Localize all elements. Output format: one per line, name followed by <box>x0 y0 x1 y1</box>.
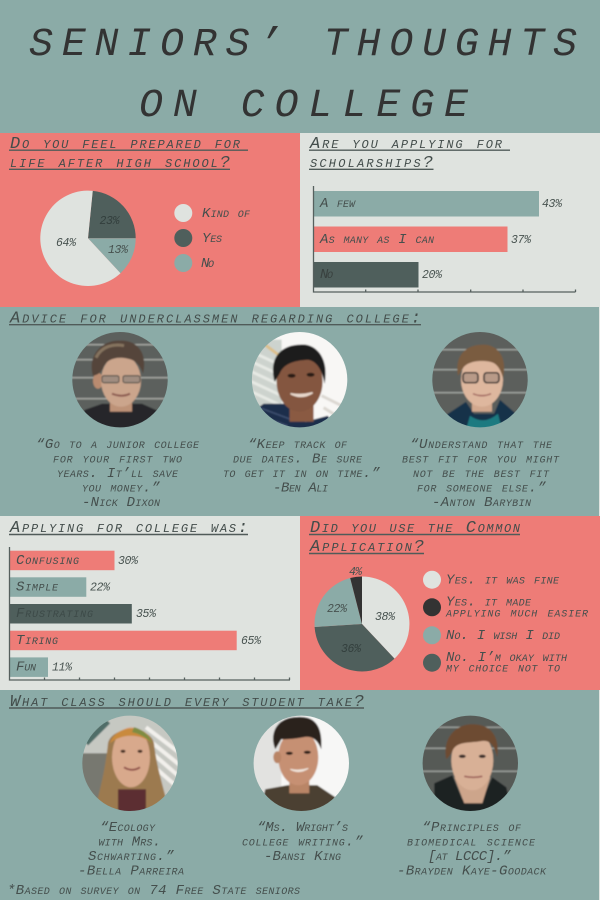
panel: prepared for life after high school <box>0 133 300 307</box>
quote: Ben Ali <box>223 437 381 496</box>
pie chart: common application: 4% <box>349 566 363 579</box>
quote: Bansi King: “Ms. Wright’s <box>257 820 348 836</box>
quote: Brayden Kaye-Goodack <box>397 820 547 880</box>
pie chart: prepared <box>40 191 136 286</box>
portrait: Ben Ali <box>250 330 350 430</box>
quote: Bansi King: college writing.” <box>242 834 364 850</box>
bar chart: applying: Frustrating <box>16 606 93 622</box>
quote: Anton Barybin: not be the best fit <box>413 466 550 482</box>
heading: prepared: Do you feel prepared for <box>10 135 241 154</box>
quote: Bella Parreira: -Bella Parreira <box>78 864 184 880</box>
quote: Bansi King: -Bansi King <box>264 849 341 865</box>
heading: common application <box>309 519 521 557</box>
bar chart: scholarships: A few <box>319 196 356 212</box>
quote: Bansi King <box>242 820 364 865</box>
panel: applying for scholarships <box>300 133 600 307</box>
heading: applying: Applying for college was: <box>9 519 248 538</box>
heading: prepared <box>9 135 248 173</box>
panel: common application <box>300 516 600 690</box>
bar chart: applying: Fun <box>16 660 36 676</box>
quote: Nick Dixon: years. It’ll save <box>57 466 179 482</box>
pie chart: prepared: 64% <box>56 237 77 250</box>
bar chart: applying: Simple <box>16 580 59 596</box>
heading: advice: Advice for underclassmen regarding college: <box>9 310 421 328</box>
heading: scholarships: Are you applying for <box>309 135 503 154</box>
legend: common application <box>423 571 588 676</box>
title: SENIORS’ THOUGHTS <box>29 23 577 68</box>
legend: prepared <box>174 204 251 272</box>
quote: Nick Dixon: for your first two <box>53 452 182 468</box>
quote: Ben Ali: to get it in on time.” <box>223 466 381 482</box>
quote: Brayden Kaye-Goodack: biomedical science <box>407 834 536 850</box>
legend: prepared: Yes <box>202 231 222 247</box>
portrait: Brayden Kaye-Goodack <box>420 713 520 813</box>
bar chart: scholarships: 20% <box>422 269 443 282</box>
quote: Brayden Kaye-Goodack: “Principles of <box>422 820 522 836</box>
quote: Brayden Kaye-Goodack: -Brayden Kaye-Goodack <box>397 864 547 880</box>
legend: prepared: No <box>201 256 214 272</box>
quote: Brayden Kaye-Goodack: [at LCCC].” <box>428 849 512 865</box>
footnote: *Based on survey on 74 Free State seniors <box>7 883 300 899</box>
bar chart: applying: 35% <box>136 608 157 621</box>
legend: prepared: Kind of <box>202 206 251 222</box>
quote: Bella Parreira: with Mrs. <box>98 834 161 850</box>
title: ON COLLEGE <box>139 84 469 129</box>
quote: Anton Barybin: best fit for you might <box>402 452 560 468</box>
heading: common application: Application? <box>309 538 424 557</box>
panel: advice for underclassmen <box>0 307 600 516</box>
heading: prepared: life after high school? <box>10 154 230 173</box>
bar chart: applying <box>10 547 290 680</box>
heading: scholarships: scholarships? <box>310 154 433 173</box>
pie chart: common application: 38% <box>375 611 396 624</box>
pie chart: common application: 22% <box>327 603 348 616</box>
legend: common application: Yes. it made <box>446 595 532 611</box>
bar chart: scholarships: As many as I can <box>319 232 434 248</box>
bar chart: applying: 30% <box>118 555 139 568</box>
legend: common application: No. I’m okay with <box>446 650 567 666</box>
quote: Nick Dixon: you money.” <box>82 480 161 496</box>
pie chart: common application <box>315 566 409 671</box>
quote: Nick Dixon: -Nick Dixon <box>82 495 160 511</box>
bar chart: applying: 22% <box>90 582 111 594</box>
heading: scholarships <box>309 135 510 173</box>
bar chart: scholarships: No <box>320 267 333 283</box>
panel: applying for college was <box>0 516 300 690</box>
panel: class every student should take <box>0 690 600 900</box>
quote: Bella Parreira: “Ecology <box>100 820 156 836</box>
legend: common application: applying much easier <box>445 606 588 622</box>
bar chart: scholarships <box>314 186 576 292</box>
quote: Anton Barybin: -Anton Barybin <box>432 495 531 511</box>
quote: Nick Dixon: “Go to a junior college <box>36 437 200 453</box>
bar chart: applying: 65% <box>241 635 262 648</box>
bar chart: scholarships: 37% <box>511 234 532 247</box>
quote: Anton Barybin <box>402 437 560 511</box>
quote: Bella Parreira: Schwarting.” <box>88 849 175 865</box>
pie chart: prepared: 23% <box>100 215 121 228</box>
quote: Nick Dixon <box>36 437 200 511</box>
quote: Anton Barybin: for someone else.” <box>417 480 547 496</box>
title <box>29 23 577 129</box>
heading: common application: Did you use the Common <box>310 519 521 538</box>
legend: common application: Yes. it was fine <box>446 572 560 588</box>
bar chart: applying: 11% <box>52 662 73 674</box>
legend: common application: my choice not to <box>446 660 560 676</box>
bar chart: scholarships: 43% <box>542 198 563 211</box>
quote: Anton Barybin: “Understand that the <box>410 437 553 453</box>
legend: common application: No. I wish I did <box>446 628 560 644</box>
quote: Bella Parreira <box>78 820 184 880</box>
portrait: Bansi King <box>251 713 351 813</box>
heading: class: What class should every student take? <box>10 693 364 712</box>
pie chart: common application: 36% <box>341 643 362 656</box>
bar chart: applying: Tiring <box>16 633 58 649</box>
portrait: Anton Barybin <box>430 330 530 430</box>
quote: Ben Ali: “Keep track of <box>248 437 348 453</box>
pie chart: prepared: 13% <box>108 244 129 257</box>
quote: Ben Ali: due dates. Be sure <box>233 452 363 468</box>
portrait: Bella Parreira <box>80 713 180 813</box>
portrait: Nick Dixon <box>70 330 170 430</box>
quote: Ben Ali: -Ben Ali <box>273 480 328 496</box>
bar chart: applying: Confusing <box>16 553 79 569</box>
